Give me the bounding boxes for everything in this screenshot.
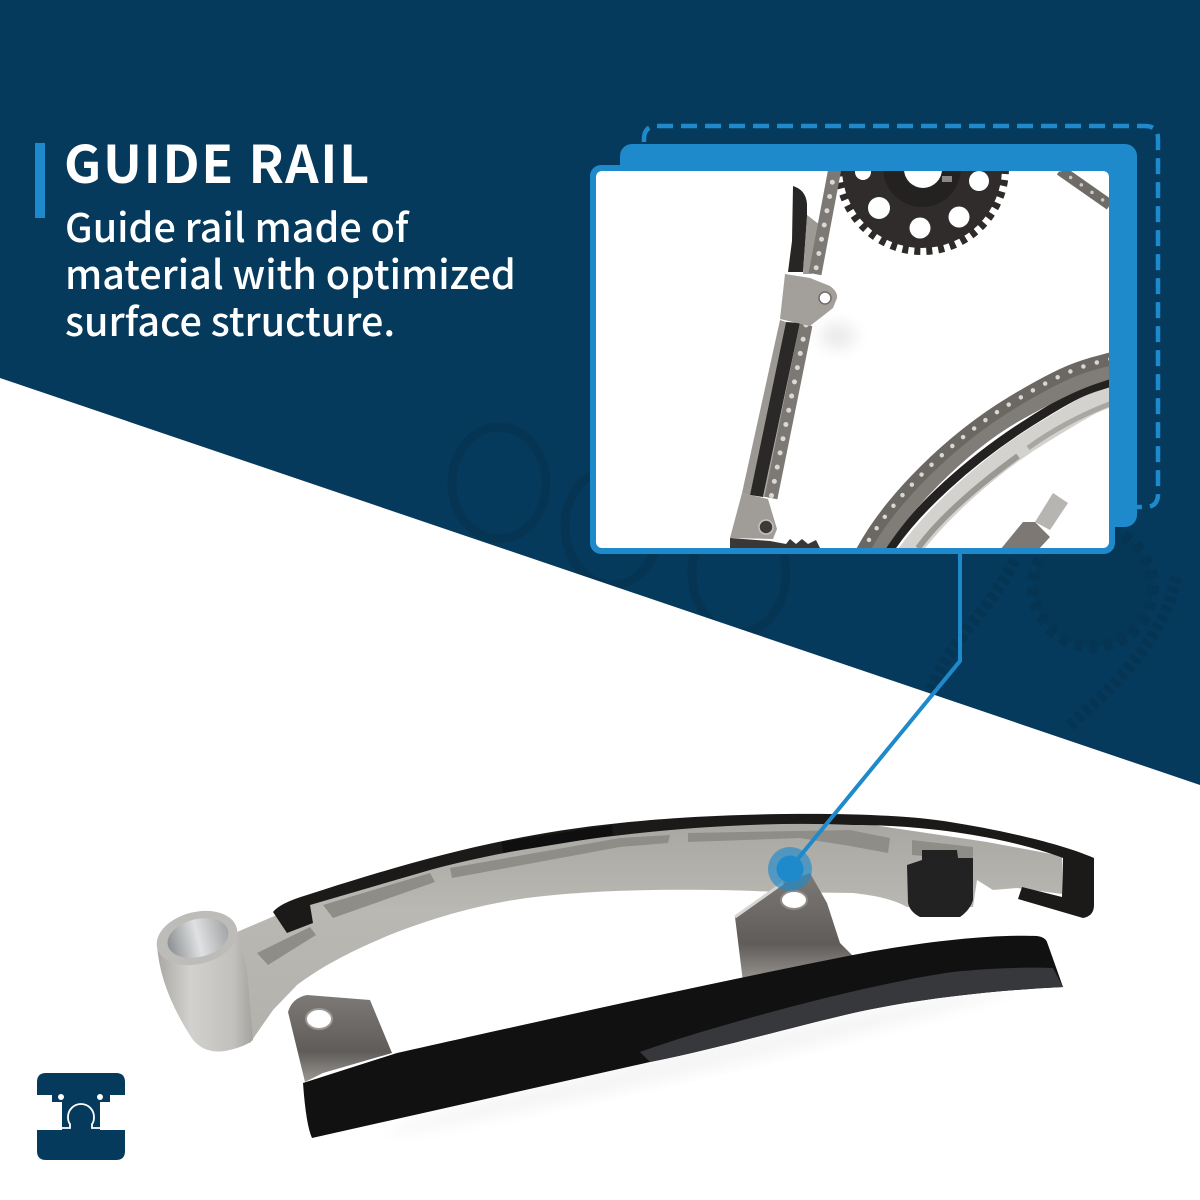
guide black tip xyxy=(788,186,807,272)
black strip raised pad xyxy=(502,825,613,853)
callout dot xyxy=(768,847,812,891)
ghost chain pattern xyxy=(452,427,1176,727)
lower sprocket fragment xyxy=(730,538,820,548)
straight guide rail xyxy=(742,320,786,495)
cylinder top ring xyxy=(151,903,243,973)
lower slider bracket right xyxy=(735,873,855,982)
description: Guide rail made of xyxy=(65,197,410,254)
dashed back frame xyxy=(644,126,1158,507)
curved guide assembly xyxy=(862,358,1114,556)
white diagonal area xyxy=(0,378,1200,1200)
inset frame xyxy=(590,165,1115,554)
cylinder mount xyxy=(157,932,253,1052)
rail slots xyxy=(257,830,973,965)
upper bracket xyxy=(780,274,837,326)
black rail top strip xyxy=(273,814,1094,933)
description: surface structure. xyxy=(65,291,395,348)
tensioner pin xyxy=(1000,493,1068,550)
black slider xyxy=(303,936,1063,1138)
description: material with optimized xyxy=(65,244,516,301)
title: GUIDE RAIL xyxy=(64,123,371,198)
slider lower face xyxy=(640,968,1063,1062)
accent bar xyxy=(35,143,45,218)
left chain xyxy=(771,168,835,498)
blue back panel xyxy=(620,144,1137,527)
silver arm body xyxy=(225,822,1062,1043)
navy background xyxy=(0,0,1200,800)
shadow patch xyxy=(820,322,856,350)
top right chain xyxy=(1060,170,1110,205)
sprocket xyxy=(838,171,1009,255)
callout leader line xyxy=(792,553,960,866)
soft floor shadow xyxy=(386,976,1014,1144)
gray web behind chain xyxy=(803,215,818,274)
lower bracket xyxy=(730,493,777,539)
main photo: guide rail parts xyxy=(151,814,1094,1144)
black block at rail head xyxy=(907,850,973,917)
lower slider bracket left xyxy=(288,995,392,1082)
icon: guide rail logo xyxy=(37,1073,125,1160)
inset photo: timing chain detail xyxy=(596,171,1109,548)
